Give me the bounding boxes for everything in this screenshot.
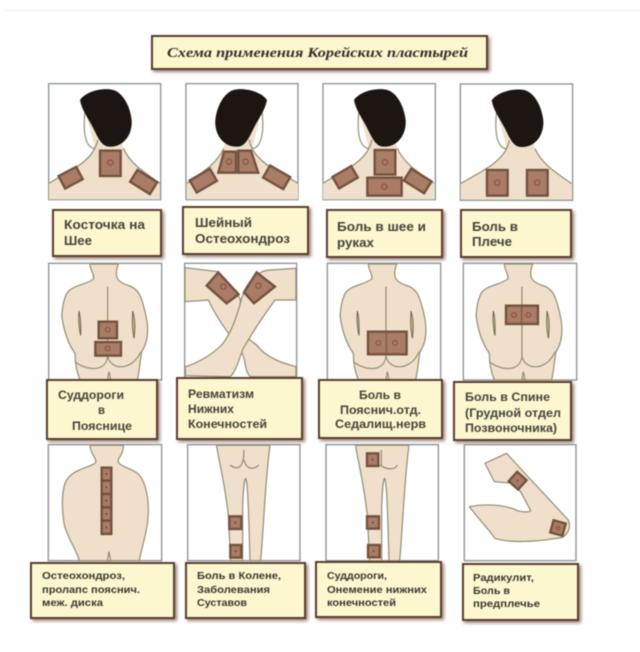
- label: thoracic back pain: [454, 382, 571, 440]
- label: disc prolapse: [31, 563, 174, 618]
- panel: thoracic back pain: [463, 263, 577, 380]
- label: lower back cramps: Пояснице: [72, 419, 132, 433]
- label: disc prolapse: пролапс пояснич.: [42, 585, 140, 596]
- label: neck bump: Шее: [64, 234, 92, 248]
- label: rheumatism of lower limbs: Конечностей: [188, 417, 267, 431]
- plasters on arm: [509, 472, 566, 536]
- plasters on neck and shoulders: [190, 151, 290, 193]
- panel: radiculitis and forearm pain: [464, 445, 576, 561]
- plasters on neck and shoulders: [332, 150, 432, 196]
- plaster on lumbar area: [368, 332, 407, 354]
- label: cervical osteochondrosis: Шейный: [195, 216, 252, 230]
- panel: disc prolapse: [48, 445, 162, 561]
- label: knee pain: [186, 563, 305, 618]
- plaster on upper back: [506, 306, 538, 324]
- label: neck bump: [53, 210, 161, 256]
- label: rheumatism of lower limbs: Ревматизм: [188, 387, 254, 401]
- label: knee pain: Боль в Колене,: [197, 571, 281, 582]
- label: rheumatism of lower limbs: Нижних: [188, 402, 234, 416]
- label: lumbar and sciatic pain: [319, 380, 442, 438]
- panel: lower back cramps: [49, 263, 162, 380]
- label: rheumatism of lower limbs: [177, 378, 302, 439]
- label: disc prolapse: Остеохондроз,: [42, 571, 125, 582]
- panel: cervical osteochondrosis: [186, 84, 298, 200]
- page top edge: [5, 10, 640, 11]
- label: cervical osteochondrosis: [183, 207, 308, 254]
- label: radiculitis and forearm pain: предплечье: [473, 599, 540, 610]
- label: cervical osteochondrosis: Остеохондроз: [195, 232, 290, 246]
- panel: lumbar and sciatic pain: [327, 263, 441, 380]
- label: radiculitis and forearm pain: [463, 564, 578, 620]
- label: lumbar and sciatic pain: Боль в: [359, 388, 401, 402]
- label: leg numbness: Суддороги,: [327, 571, 387, 582]
- label: neck and arm pain: [327, 210, 442, 257]
- panel: knee pain: [188, 445, 300, 561]
- plasters on lower back: [95, 322, 121, 356]
- panel: neck and arm pain: [323, 84, 435, 200]
- label: thoracic back pain: (Грудной отдел: [465, 406, 561, 420]
- label: knee pain: Суставов: [197, 598, 247, 609]
- label: lumbar and sciatic pain: Седалищ.нерв: [335, 417, 426, 431]
- label: lower back cramps: [47, 380, 157, 439]
- label: neck and arm pain: Боль в шее и: [337, 220, 426, 234]
- title: Схема применения Корейских пластырей: [167, 45, 469, 60]
- plasters along spine: [102, 468, 111, 534]
- label: radiculitis and forearm pain: Радикулит,: [473, 573, 534, 584]
- title: [152, 36, 487, 69]
- plasters on neck and shoulders: [59, 151, 157, 194]
- label: lower back cramps: в: [98, 403, 105, 417]
- plasters on shoulders: [487, 170, 548, 196]
- plasters on knees: [207, 272, 275, 303]
- label: neck bump: Косточка на: [64, 218, 146, 232]
- plasters on hip, knee and shin: [367, 453, 380, 557]
- label: leg numbness: Онемение нижних: [327, 585, 427, 596]
- plasters on knee and shin: [229, 516, 241, 558]
- label: disc prolapse: меж. диска: [42, 598, 103, 609]
- label: leg numbness: конечностей: [327, 598, 396, 609]
- panel: leg numbness: [326, 445, 438, 561]
- label: shoulder pain: Боль в: [472, 220, 518, 234]
- label: lower back cramps: Суддороги: [58, 388, 124, 402]
- label: knee pain: Заболевания: [197, 584, 270, 596]
- label: leg numbness: [316, 562, 441, 617]
- label: shoulder pain: Плече: [472, 235, 512, 249]
- label: thoracic back pain: Позвоночника): [465, 421, 557, 435]
- label: radiculitis and forearm pain: Боль в: [473, 586, 510, 597]
- panel: rheumatism of lower limbs: [185, 263, 297, 380]
- label: shoulder pain: [461, 210, 571, 257]
- label: lumbar and sciatic pain: Пояснич.отд.: [340, 403, 421, 417]
- panel: neck bump: [49, 84, 161, 200]
- label: neck and arm pain: руках: [337, 236, 374, 250]
- panel: shoulder pain: [460, 84, 573, 200]
- label: thoracic back pain: Боль в Спине: [465, 390, 550, 404]
